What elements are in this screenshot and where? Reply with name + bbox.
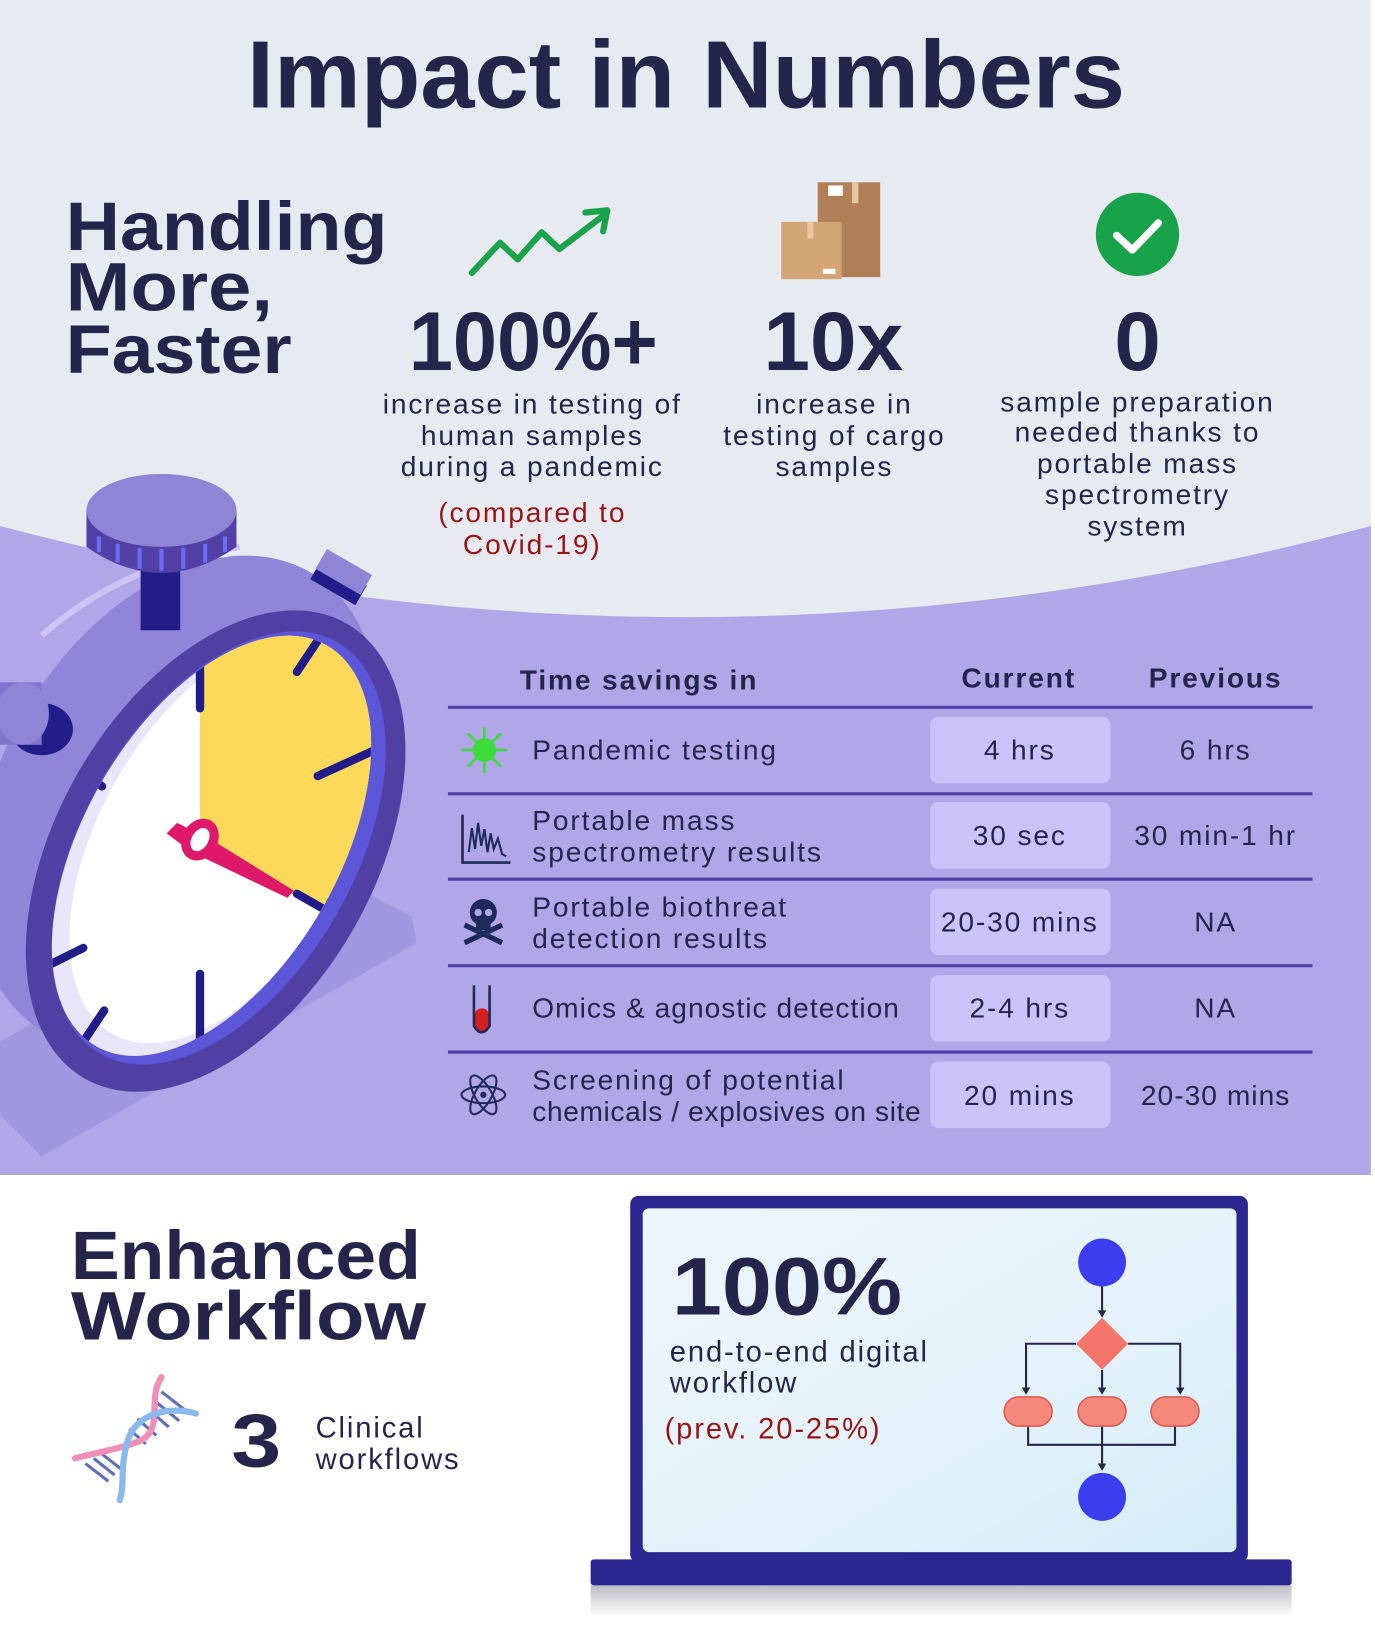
heading: Handling More, Faster: Handling <box>66 188 388 265</box>
stat: 0: 0 <box>1114 295 1161 388</box>
row: omics: 2-4 hrs <box>969 993 1070 1024</box>
icon: check circle <box>1096 193 1179 276</box>
stat: 100% digital: 100% <box>672 1242 902 1333</box>
heading: Enhanced Workflow: Workflow <box>71 1278 427 1355</box>
row: mass spectrometry: Portable mass <box>532 805 736 836</box>
top button <box>310 549 372 605</box>
laptop <box>591 1196 1292 1617</box>
row: biothreat: NA <box>1194 906 1237 937</box>
row: pandemic testing <box>461 727 1252 773</box>
table header <box>520 663 1282 696</box>
stat: 100%+: during a pandemic <box>401 451 664 482</box>
stat: 3 clinical workflows: Clinical <box>316 1413 425 1445</box>
stat: 100%+: increase in testing of <box>383 389 682 420</box>
row: omics: Omics & agnostic detection <box>532 993 900 1024</box>
flowchart <box>1004 1239 1199 1521</box>
stat: 100%+: (compared to <box>438 497 626 528</box>
heading: Enhanced Workflow: Enhanced <box>71 1217 421 1294</box>
row: pandemic testing: Pandemic testing <box>532 734 778 765</box>
stat: 100% digital: (prev. 20-25%) <box>665 1414 882 1446</box>
stat: 100%+: 100%+ <box>409 295 658 388</box>
row: screening: 20-30 mins <box>1141 1080 1290 1111</box>
table header: Current <box>961 663 1076 694</box>
icon: trend arrow <box>472 210 607 273</box>
table: time savings <box>448 663 1313 1128</box>
row: mass spectrometry: 30 min-1 hr <box>1134 820 1297 851</box>
row: screening: chemicals / explosives on site <box>532 1096 921 1127</box>
row: pandemic testing: 6 hrs <box>1180 734 1252 765</box>
row: biothreat <box>465 892 1237 954</box>
stat: 0: sample preparation <box>1000 386 1275 417</box>
illustration: stopwatch <box>0 474 416 1156</box>
heading: Enhanced Workflow <box>71 1217 427 1355</box>
row: biothreat: detection results <box>532 923 769 954</box>
stat: 3 clinical workflows: workflows <box>315 1444 460 1476</box>
row: screening <box>461 1065 1290 1127</box>
stat: 10x: 10x <box>764 295 903 388</box>
side button <box>0 682 73 755</box>
icon: DNA <box>75 1377 196 1500</box>
stat: 100%+: human samples <box>421 420 644 451</box>
row: pandemic testing: 4 hrs <box>984 734 1056 765</box>
stat: 100%+ <box>383 210 682 560</box>
stat: 0 <box>1000 193 1275 541</box>
row: omics <box>474 985 1237 1033</box>
stat: 100% digital: workflow <box>669 1368 798 1400</box>
row: screening: 20 mins <box>964 1080 1076 1111</box>
row: biothreat: 20-30 mins <box>941 906 1099 937</box>
stat: 0: spectrometry <box>1045 479 1230 510</box>
hand <box>167 812 294 898</box>
stat: 100% digital <box>665 1242 929 1446</box>
row: mass spectrometry: 30 sec <box>973 820 1067 851</box>
row: screening: Screening of potential <box>532 1065 845 1096</box>
face <box>52 636 372 1056</box>
stat: 3 clinical workflows <box>231 1399 460 1483</box>
row: mass spectrometry <box>462 805 1297 867</box>
stat: 10x <box>723 182 945 482</box>
table header: Previous <box>1149 663 1282 694</box>
table header: Time savings in <box>520 665 758 696</box>
stat: 10x: increase in <box>756 389 913 420</box>
heading: Handling More, Faster: Faster <box>66 311 292 388</box>
stat: 0: portable mass <box>1037 448 1238 479</box>
icon: boxes <box>781 182 880 279</box>
stat: 10x: samples <box>775 451 893 482</box>
heading: Handling More, Faster <box>66 188 388 388</box>
row: mass spectrometry: spectrometry results <box>532 836 823 867</box>
ring <box>0 545 484 1158</box>
stat: 10x: testing of cargo <box>723 420 945 451</box>
crown <box>86 474 236 630</box>
stat: 0: system <box>1087 510 1188 541</box>
stat: 100% digital: end-to-end digital <box>670 1336 929 1368</box>
stat: 100%+: Covid-19) <box>463 529 602 560</box>
stat: 3 clinical workflows: 3 <box>231 1399 281 1483</box>
title: Impact in Numbers <box>247 21 1125 128</box>
row: omics: NA <box>1194 993 1237 1024</box>
row: biothreat: Portable biothreat <box>532 892 788 923</box>
stat: 0: needed thanks to <box>1015 417 1260 448</box>
heading: Handling More, Faster: More, <box>66 248 273 325</box>
